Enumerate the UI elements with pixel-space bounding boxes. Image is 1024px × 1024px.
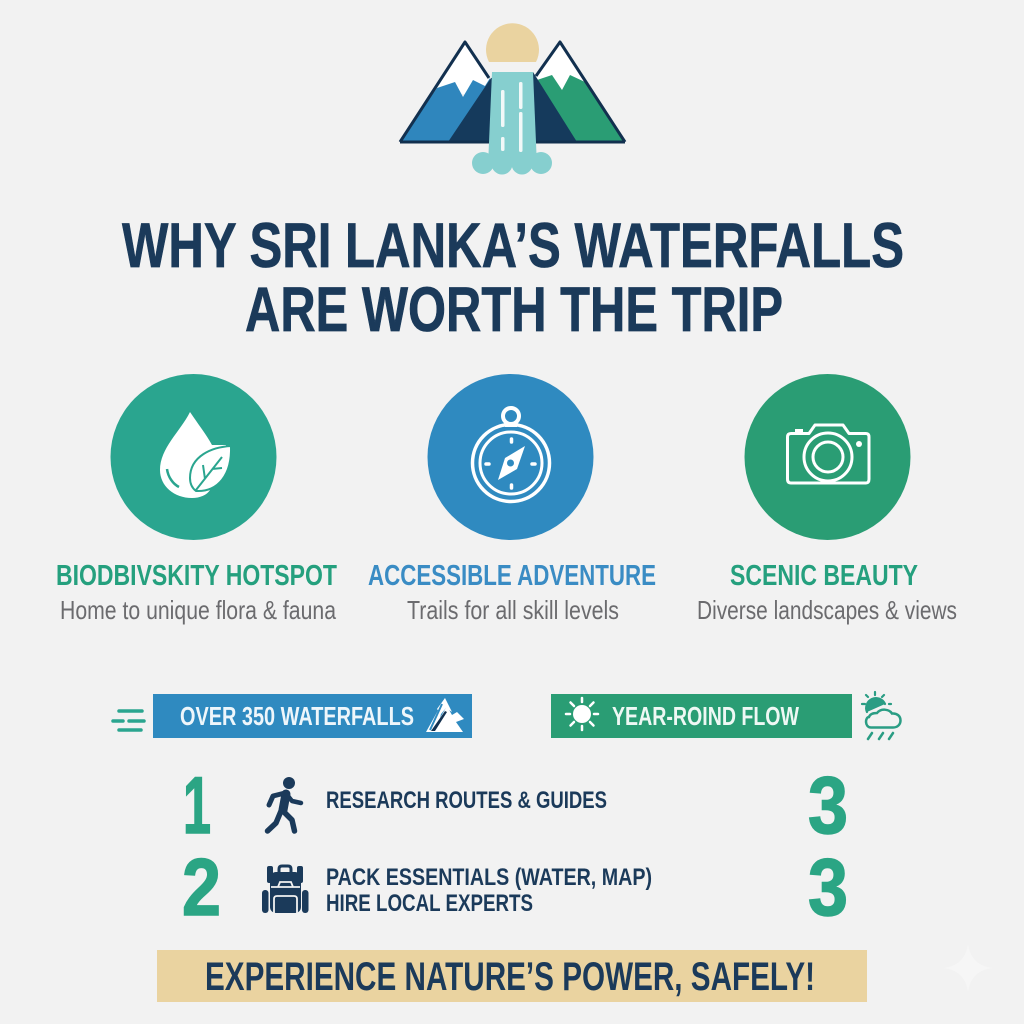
title <box>122 211 904 345</box>
step 1: research routes: 3 <box>808 761 848 851</box>
banner: year-round flow <box>551 694 852 738</box>
icon: walking person <box>268 777 301 831</box>
text: adventure description: Trails for all skill levels <box>407 595 619 625</box>
text: hire local experts: HIRE LOCAL EXPERTS <box>326 890 533 917</box>
icon: left mountain <box>400 42 490 142</box>
text: pack essentials: PACK ESSENTIALS (WATER, MAP) <box>326 864 652 891</box>
icon: right mountain <box>536 42 625 142</box>
heading: scenic beauty: SCENIC BEAUTY <box>730 560 918 592</box>
callout: safety banner <box>157 950 867 1002</box>
icon: water drop and leaf <box>110 374 276 540</box>
step 1: research routes: 1 <box>183 761 211 851</box>
heading: accessible adventure: ACCESSIBLE ADVENTURE <box>368 560 656 592</box>
step 2: pack essentials and hire experts: 2 <box>182 843 221 933</box>
icon: water flow lines <box>113 711 144 730</box>
icon: mountain <box>426 698 464 732</box>
text: scenic description: Diverse landscapes & views <box>697 595 957 625</box>
title: ARE WORTH THE TRIP <box>245 275 783 345</box>
logo: mountains, sun and waterfall <box>400 23 625 175</box>
panel: scenic beauty <box>697 374 957 625</box>
banner: over 350 waterfalls: OVER 350 WATERFALLS <box>180 701 414 731</box>
callout: safety banner: EXPERIENCE NATURE’S POWER, SAFELY! <box>205 955 815 999</box>
icon: compass <box>428 374 594 540</box>
icon: sun <box>566 698 598 730</box>
icon: backpack <box>262 866 308 913</box>
icon: sun <box>486 23 539 62</box>
icon: waterfall <box>472 72 552 174</box>
banner: year-round flow: YEAR-ROIND FLOW <box>612 701 799 731</box>
text: research routes: RESEARCH ROUTES & GUIDES <box>326 787 607 814</box>
step 2: pack essentials and hire experts <box>182 843 848 933</box>
icon: camera <box>744 374 910 540</box>
banner: over 350 waterfalls <box>153 694 472 738</box>
heading: biodiversity: BIODBIVSKITY HOTSPOT <box>56 560 337 592</box>
panel: accessible adventure <box>368 374 656 625</box>
step 2: pack essentials and hire experts: 3 <box>808 843 848 933</box>
icon: sun, cloud and rain <box>862 692 900 739</box>
icon: central dark mountain <box>448 72 577 142</box>
step 1: research routes <box>183 761 848 851</box>
panel: biodiversity hotspot <box>56 374 337 625</box>
icon: faint sparkle <box>944 944 992 992</box>
text: biodiversity description: Home to unique flora & fauna <box>60 595 336 625</box>
